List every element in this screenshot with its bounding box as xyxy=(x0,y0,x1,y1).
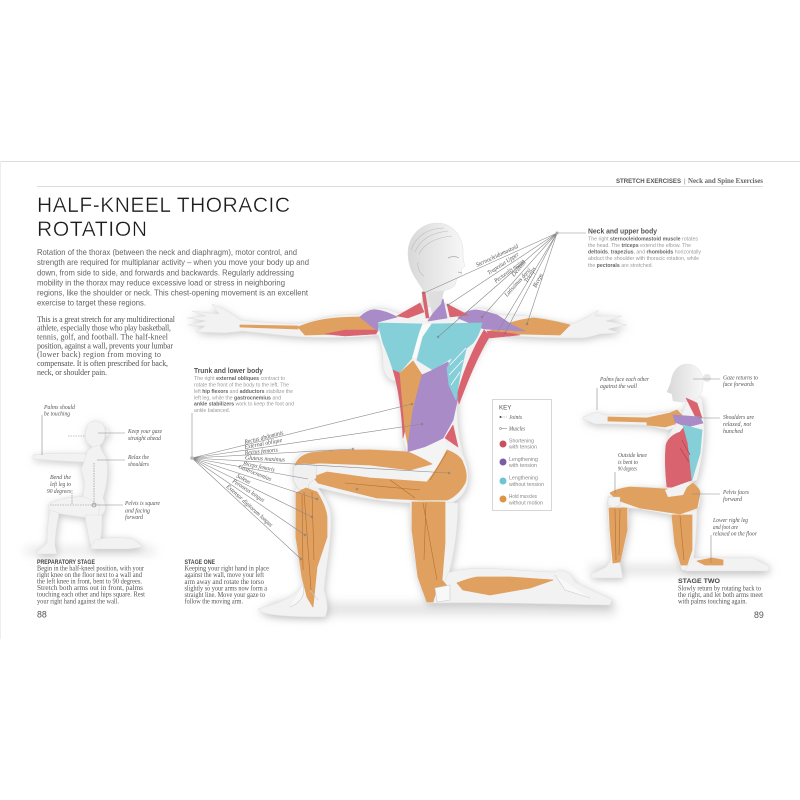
hip highlight xyxy=(408,438,447,482)
muscle labels: upper: Trapezius Upper xyxy=(486,251,521,277)
intro text: down, from side to side, and forwards and backwards. Regularly addressing xyxy=(37,267,294,277)
key: muscles: Muscles xyxy=(508,426,525,432)
text: stage one: straight line. Move your gaze to xyxy=(184,590,265,599)
text block: trunk and lower body: ankle stabilizers work to keep the foot and xyxy=(194,402,294,408)
figure: stage two xyxy=(583,364,770,578)
text block: trunk and lower body: left leg, while the gastrocnemius and xyxy=(194,396,281,402)
text block: trunk and lower body: Trunk and lower body xyxy=(194,366,264,375)
muscle labels: lower xyxy=(224,429,286,529)
key: lengthening without tension xyxy=(500,476,544,488)
leader lines: neck and upper body xyxy=(423,232,586,338)
text: stage two: Slowly return by rotating back to xyxy=(678,584,761,592)
muscle: deltoids xyxy=(360,310,397,331)
annotations: preparatory stage: Relax the xyxy=(127,454,149,461)
annotations: stage two: Gaze returns to xyxy=(723,374,758,382)
key: lengthening without tension: Lengthening xyxy=(509,476,538,482)
muscle labels: lower: Peroneus longus xyxy=(230,477,266,504)
annotations: preparatory stage: straight ahead xyxy=(128,435,162,442)
text block: trunk and lower body: The right external obliques contract to xyxy=(194,376,285,382)
text: preparatory stage: your right hand against the wall. xyxy=(37,596,119,606)
intro text: regions, like the shoulder or neck. This chest-opening movement is an excellent xyxy=(37,288,309,298)
annotations: stage two: Lower right leg xyxy=(712,517,748,524)
running header: STRETCH EXERCISES xyxy=(616,178,681,185)
annotations: preparatory stage: forward xyxy=(125,514,144,521)
text block: trunk and lower body: rotate the front of the body to the left. The xyxy=(194,382,289,388)
leader lines: trunk and lower body xyxy=(190,403,450,560)
muscle labels: upper: Triceps xyxy=(523,266,538,284)
text block: trunk and lower body xyxy=(194,366,294,414)
serif intro text: This is a great stretch for any multidirectional xyxy=(37,315,176,324)
page frame xyxy=(0,161,800,639)
muscle labels: lower: Soleus xyxy=(235,473,252,486)
muscle: lower legs xyxy=(296,488,327,607)
serif intro text: athlete, especially those who play basketball, xyxy=(37,324,171,332)
title xyxy=(37,194,290,241)
annotations: preparatory stage: be touching xyxy=(44,410,70,418)
feet bones xyxy=(290,575,590,607)
text: stage one: against the wall, move your left xyxy=(184,570,264,579)
running header: | xyxy=(684,178,686,185)
text: preparatory stage: PREPARATORY STAGE xyxy=(37,560,95,566)
text: stage one: arm away and rotate the torso xyxy=(184,577,264,586)
key: lengthening without tension: without tension xyxy=(509,482,544,488)
muscle labels: lower: Rectus abdominis xyxy=(243,429,285,446)
text block: neck and upper body: the pectorals are stretched. xyxy=(588,263,653,269)
serif intro text xyxy=(37,315,176,377)
key: shortening: with tension xyxy=(509,444,537,450)
annotations: preparatory stage: 90 degrees xyxy=(47,488,71,495)
text: preparatory stage: Begin in the half-kneel position, with your xyxy=(37,564,144,572)
floor shadows xyxy=(25,548,765,615)
title: HALF-KNEEL THORACIC xyxy=(37,194,290,217)
running header: Neck and Spine Exercises xyxy=(688,178,763,185)
text: preparatory stage: the left knee in front, bent to 90 degrees. xyxy=(37,576,142,586)
intro text: Rotation of the thorax (between the neck and diaphragm), motor control, and xyxy=(37,247,297,257)
muscle labels: lower: Gluteus maximus xyxy=(245,455,286,464)
key: KEY xyxy=(499,404,511,412)
muscle labels: lower: Biceps femoris xyxy=(243,460,276,474)
annotations: stage two: is bent to xyxy=(618,459,638,466)
text: preparatory stage: right knee on the floor next to a wall and xyxy=(37,570,142,579)
annotations: stage two xyxy=(597,374,758,563)
annotations: preparatory stage: and facing xyxy=(125,508,150,514)
text: stage two: the right, and let both arms meet xyxy=(678,590,763,599)
serif intro text: compensate. It is often prescribed for back, xyxy=(37,359,168,368)
annotations: preparatory stage: left leg to xyxy=(50,481,71,488)
muscle: pectorals xyxy=(378,323,422,372)
muscle labels: lower: Gastrocnemius xyxy=(237,463,273,483)
key: joints: Joints xyxy=(509,414,522,421)
text block: neck and upper body: Neck and upper body xyxy=(588,226,658,236)
muscle labels: lower: External oblique xyxy=(243,437,283,451)
page number 88: 88 xyxy=(37,610,47,620)
page number 89: 89 xyxy=(754,610,764,620)
muscle labels: upper: Sternocleidomastoid xyxy=(475,243,520,269)
serif intro text: (lower back) region from moving to xyxy=(37,350,161,359)
muscle labels: upper: Deltoid xyxy=(510,259,528,279)
key: hold muscles xyxy=(500,494,543,506)
annotations: stage two: Shoulders are xyxy=(723,414,754,421)
muscle: thigh xyxy=(295,450,432,470)
intro text: mobility in the thorax may reduce excessive load or stress in neighboring xyxy=(37,278,285,288)
annotations: stage two: Pelvis faces xyxy=(722,489,749,496)
figure: preparatory stage xyxy=(33,421,143,554)
muscle: arms xyxy=(298,317,378,335)
key: hold muscles: Hold muscles xyxy=(509,494,537,500)
annotations: preparatory stage xyxy=(42,404,162,521)
text block: trunk and lower body: left hip flexors and adductors stabilize the xyxy=(194,389,293,395)
muscle labels: upper xyxy=(475,243,545,299)
key: shortening xyxy=(500,438,537,450)
text block: trunk and lower body: ankle balanced. xyxy=(194,408,230,414)
muscle: abdomen xyxy=(400,361,422,445)
text: preparatory stage xyxy=(37,560,145,606)
text: preparatory stage: touching each other and hips square. Rest xyxy=(37,590,145,598)
annotations: stage two: forward xyxy=(723,496,743,503)
annotations: preparatory stage: Keep your gaze xyxy=(127,428,162,435)
text: stage two: STAGE TWO xyxy=(678,579,720,585)
annotations: stage two: and foot are xyxy=(713,524,738,531)
key: shortening: Shortening xyxy=(509,438,534,444)
muscle labels: upper: Biceps xyxy=(532,272,545,289)
muscle labels: lower: Extensor digitorum longus xyxy=(224,483,274,529)
stage two: head xyxy=(667,364,711,402)
text: stage one: STAGE ONE xyxy=(184,560,215,566)
text block: neck and upper body: the head. The triceps extend the elbow. The xyxy=(588,243,691,249)
text: stage two: with palms touching again. xyxy=(678,596,747,606)
annotations: stage two: 90 degrees xyxy=(618,466,637,472)
annotations: preparatory stage: Bend the xyxy=(50,474,71,481)
serif intro text: position, against a wall, prevents your lumbar xyxy=(37,342,173,350)
silhouette xyxy=(187,304,627,617)
annotations: stage two: face forwards xyxy=(723,381,754,388)
serif intro text: tennis, golf, and football. The half-kneel xyxy=(37,332,169,342)
annotations: stage two: relaxed on the floor xyxy=(713,530,757,538)
key: lengthening with tension: with tension xyxy=(509,463,537,469)
hair strands xyxy=(411,228,452,276)
text: stage one: slightly so your arms now form a xyxy=(184,584,268,592)
text block: neck and upper body: The right sternocleidomastoid muscle rotates xyxy=(588,236,698,242)
title: ROTATION xyxy=(37,218,147,241)
annotations: stage two: Outside knee xyxy=(618,452,647,459)
text: stage one: Keeping your right hand in place xyxy=(184,564,269,572)
muscle labels: lower: Rectus femoris xyxy=(244,447,279,457)
key xyxy=(492,400,552,510)
text block: neck and upper body: abduct the shoulder with thoracic rotation, while xyxy=(588,256,699,262)
head xyxy=(408,223,465,307)
muscle: flank xyxy=(457,330,490,404)
text: stage one: follow the moving arm. xyxy=(184,596,243,606)
annotations: preparatory stage: shoulders xyxy=(128,461,149,468)
annotations: stage two: against the wall xyxy=(600,383,637,390)
text block: neck and upper body: deltoids, trapezius, and rhomboids horizontally xyxy=(588,250,701,256)
annotations: preparatory stage: Pelvis is square xyxy=(124,500,160,507)
running header xyxy=(616,178,763,185)
muscle labels: upper: Pectoralis major xyxy=(492,258,526,285)
key: lengthening with tension: Lengthening xyxy=(509,457,538,463)
intro text: strength are required for multiplanar activity – when you move your body up and xyxy=(37,257,309,267)
intro text: exercise to target these regions. xyxy=(37,298,146,308)
key: lengthening with tension xyxy=(500,457,538,469)
annotations: preparatory stage: Palms should xyxy=(43,404,76,411)
annotations: stage two: Palms face each other xyxy=(599,376,649,383)
muscle labels: upper: Latissimus dorsi xyxy=(503,267,533,299)
annotations: stage two: relaxed, not xyxy=(723,421,751,428)
intro text xyxy=(37,247,309,308)
key: hold muscles: without motion xyxy=(509,500,543,506)
muscle: neck and trapezius xyxy=(397,303,424,318)
text: preparatory stage: Stretch both arms out in front, palms xyxy=(37,583,143,592)
stage two: muscles xyxy=(686,398,702,418)
main figure: stage one xyxy=(187,223,627,617)
joint: knee xyxy=(293,464,317,490)
text block: neck and upper body xyxy=(588,226,701,269)
text: stage two xyxy=(678,579,763,606)
annotations: stage two: hunched xyxy=(723,428,744,435)
text: stage one xyxy=(184,560,269,606)
serif intro text: neck, or shoulder pain. xyxy=(37,368,107,377)
